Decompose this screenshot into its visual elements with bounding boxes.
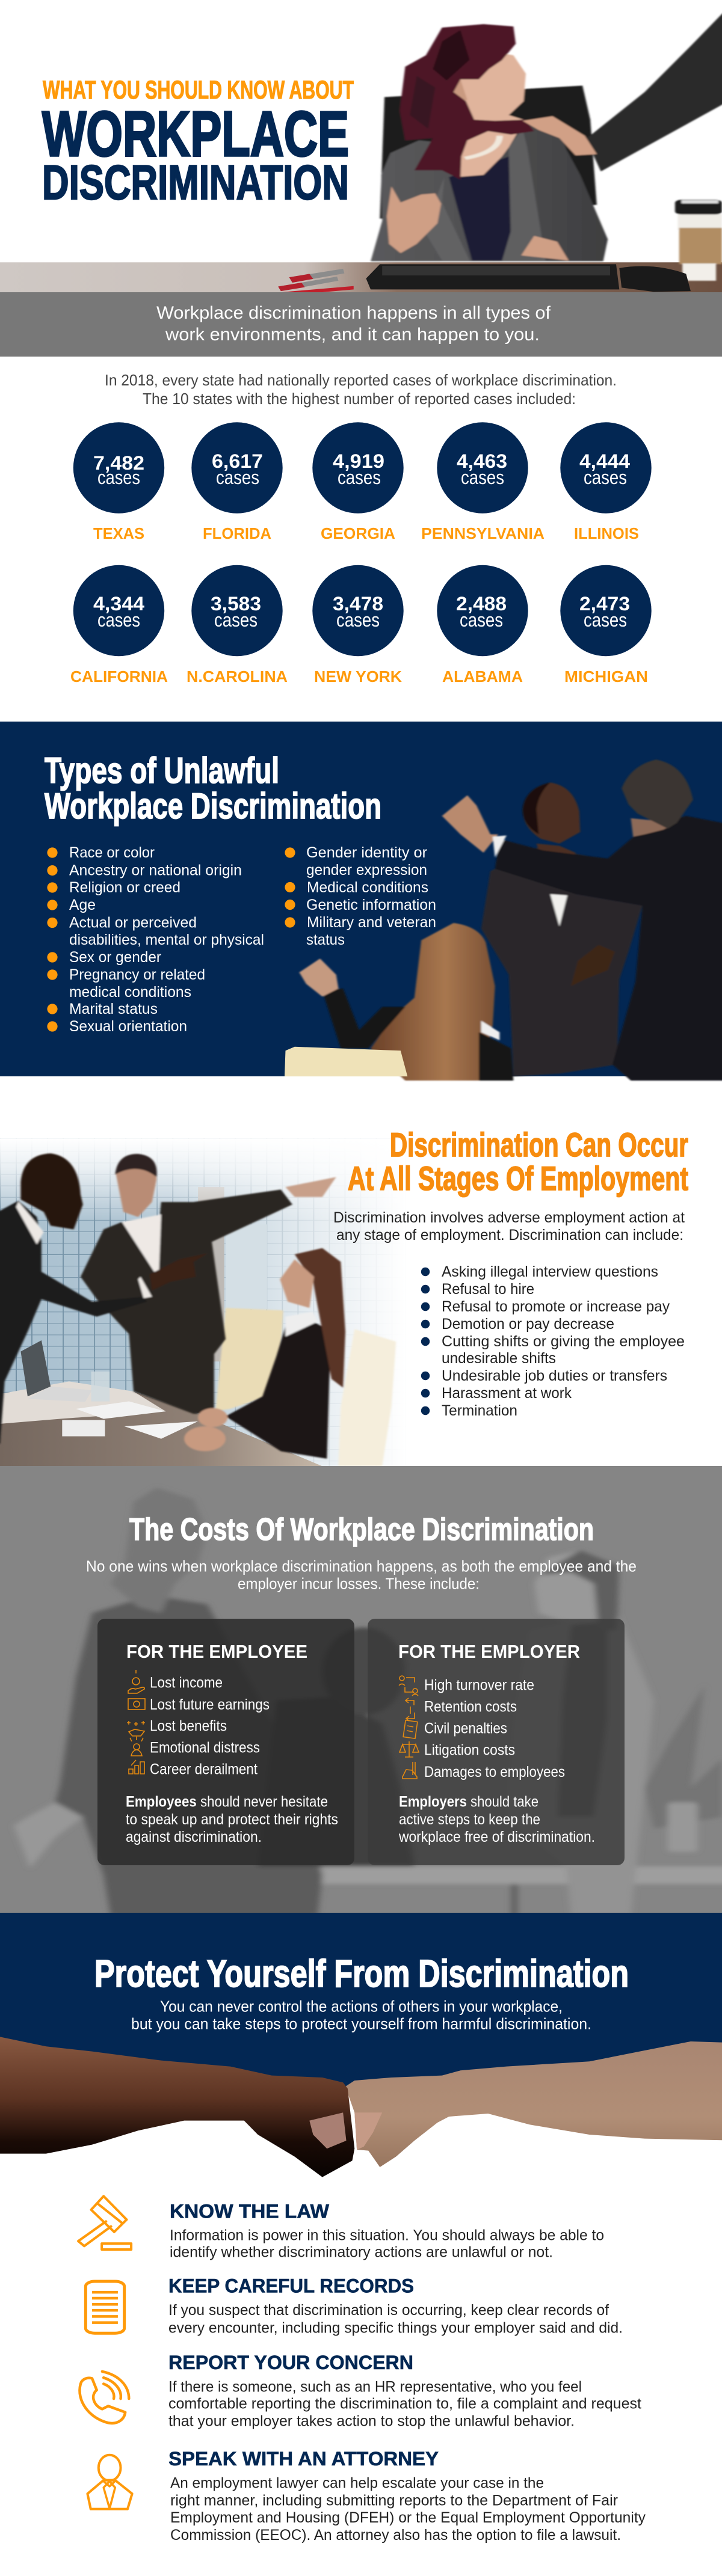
body text [168, 2379, 641, 2429]
list: adverse employment actions: Asking illegal interview questions [442, 1263, 658, 1280]
list: employer losses: Litigation costs [424, 1741, 515, 1758]
body text: If there is someone, such as an HR representative, who you feel [168, 2379, 582, 2396]
stat: Texas [73, 422, 164, 542]
stat: California [70, 565, 168, 685]
list: types column 1: Ancestry or national origin [69, 862, 242, 879]
list: types column 1: Religion or creed [69, 879, 180, 896]
stat: Pennsylvania: 4,463 [457, 450, 507, 472]
body text: that your employer takes action to stop the unlawful behavior. [168, 2412, 575, 2429]
list: adverse employment actions: Cutting shifts or giving the employee [442, 1333, 685, 1350]
hero title: WORKPLACE [42, 99, 349, 170]
stat: North Carolina: N.CAROLINA [187, 667, 288, 685]
text: costs introduction: employer incur losses. These include: [238, 1574, 480, 1592]
list: types column 2: status [306, 931, 345, 948]
list: employer losses: Damages to employees [424, 1764, 565, 1780]
text: employee advice [126, 1794, 338, 1845]
hero title: DISCRIMINATION [42, 156, 349, 210]
intro text: 2018 state statistics: The 10 states with the highest number of reported cases included: [143, 390, 576, 408]
body text: If you suspect that discrimination is occurring, keep clear records of [168, 2302, 609, 2319]
text: protect introduction: but you can take steps to protect yourself from harmful discrimination. [131, 2014, 591, 2032]
text: costs introduction [86, 1557, 637, 1592]
stat: Alabama: cases [460, 609, 503, 631]
heading: REPORT YOUR CONCERN [168, 2352, 413, 2373]
list: types column 1: disabilities, mental or physical [69, 931, 264, 948]
text: employer advice: workplace free of discrimination. [398, 1829, 595, 1845]
body text: comfortable reporting the discrimination to, file a complaint and request [168, 2396, 641, 2412]
stat: Michigan [560, 565, 652, 685]
stat: California: 4,344 [93, 593, 144, 615]
list: employee losses: Lost income [150, 1674, 223, 1691]
hero panel [0, 5, 722, 292]
text: employee advice: against discrimination. [126, 1829, 262, 1845]
stat: Illinois: cases [584, 467, 627, 488]
gray intro band [0, 292, 722, 357]
heading: types of unlawful workplace discrimination [45, 750, 381, 826]
stat: Alabama [437, 565, 528, 685]
list: employer losses: High turnover rate [424, 1676, 534, 1693]
text: stages introduction [333, 1209, 685, 1244]
list: types column 2: Medical conditions [307, 879, 428, 896]
text: costs introduction: No one wins when workplace discrimination happens, as both the employee and the [86, 1557, 637, 1575]
stat: Alabama: ALABAMA [442, 667, 523, 685]
card heading: employee: FOR THE EMPLOYEE [126, 1641, 307, 1662]
step: know the law [78, 2196, 604, 2261]
stat: Texas: 7,482 [93, 452, 144, 474]
card: for the employee [97, 1619, 354, 1865]
stat: Texas: cases [97, 467, 140, 488]
list: employee losses: Lost benefits [150, 1717, 227, 1734]
heading: KNOW THE LAW [170, 2201, 330, 2222]
heading: the costs of workplace discrimination: The Costs Of Workplace Discrimination [129, 1512, 594, 1547]
heading: SPEAK WITH AN ATTORNEY [168, 2448, 439, 2470]
text: employer advice: active steps to keep the [399, 1811, 540, 1828]
list: adverse employment actions [421, 1263, 685, 1419]
stat: North Carolina: 3,583 [211, 593, 261, 615]
list: types column 2: Military and veteran [307, 914, 436, 931]
photo: arguing coworkers [285, 759, 722, 1081]
stat: North Carolina [187, 565, 288, 685]
stat: New York: cases [336, 609, 380, 631]
text: stages introduction: any stage of employment. Discrimination can include: [336, 1227, 683, 1244]
stat: Michigan: cases [584, 609, 627, 631]
panel: protect yourself [0, 1913, 722, 2177]
stat: Michigan: 2,473 [579, 593, 630, 615]
body text: Information is power in this situation. You should always be able to [170, 2227, 604, 2244]
hero title [42, 99, 349, 210]
step: keep careful records [85, 2275, 623, 2337]
body text: every encounter, including specific things your employer said and did. [168, 2320, 623, 2337]
hero kicker: WHAT YOU SHOULD KNOW ABOUT [43, 76, 354, 105]
step: speak with an attorney [87, 2448, 646, 2544]
panel: stages of employment [0, 1126, 688, 1466]
stat: Georgia: cases [338, 467, 381, 488]
body text [170, 2475, 646, 2544]
list: adverse employment actions: Demotion or pay decrease [442, 1316, 614, 1332]
list: adverse employment actions: Undesirable job duties or transfers [442, 1367, 667, 1384]
panel: costs of workplace discrimination [0, 1466, 722, 1916]
stat: North Carolina: cases [214, 609, 258, 631]
photo: office argument in front of windows [0, 1138, 405, 1466]
gray intro band: Workplace discrimination happens in all types of [156, 303, 551, 323]
icons: employee losses [127, 1670, 145, 1774]
icon: phone [79, 2372, 129, 2423]
list: employee losses [150, 1674, 270, 1777]
card: for the employer [368, 1619, 625, 1865]
stat: Pennsylvania: cases [461, 467, 504, 488]
step: report your concern [79, 2352, 641, 2429]
heading: KEEP CAREFUL RECORDS [168, 2275, 414, 2297]
stat: Georgia: 4,919 [333, 450, 384, 472]
stat: Florida [191, 422, 283, 542]
stat: Georgia [312, 422, 404, 542]
text: employer advice [398, 1794, 595, 1845]
background photo: gray office scene [14, 1488, 722, 1916]
list: types column 1 [47, 844, 264, 1035]
gray intro band: work environments, and it can happen to you. [165, 325, 540, 345]
stat: New York: 3,478 [333, 593, 383, 615]
list: types column 1: Marital status [69, 1001, 158, 1017]
hero desk [0, 262, 722, 292]
stat: New York: NEW YORK [314, 667, 402, 685]
list: types column 1: Actual or perceived [69, 914, 197, 931]
list: types column 1: Pregnancy or related [69, 966, 205, 983]
hero photo: woman at desk with hand on her shoulder [278, 5, 722, 292]
text: stages introduction: Discrimination involves adverse employment action at [333, 1209, 685, 1226]
photo: two arms fist bump [0, 2034, 722, 2177]
body text: identify whether discriminatory actions are unlawful or not. [170, 2244, 553, 2261]
icon: attorney [87, 2455, 132, 2509]
panel: types of unlawful discrimination [0, 722, 722, 1081]
list: employee losses: Career derailment [150, 1761, 258, 1777]
intro text: 2018 state statistics: In 2018, every state had nationally reported cases of workplace discrimination. [105, 371, 617, 389]
list: employer losses: Retention costs [424, 1698, 517, 1715]
text: protect introduction: You can never control the actions of others in your workplace, [160, 1998, 563, 2016]
list: adverse employment actions: Refusal to promote or increase pay [442, 1298, 670, 1315]
stat: Pennsylvania [421, 422, 545, 542]
heading: types of unlawful workplace discrimination: Types of Unlawful [45, 750, 279, 791]
list: types column 2 [285, 844, 436, 948]
stat: New York [312, 565, 404, 685]
list: types column 1: medical conditions [69, 984, 191, 1001]
heading: types of unlawful workplace discrimination: Workplace Discrimination [45, 786, 381, 826]
body text: An employment lawyer can help escalate your case in the [170, 2475, 544, 2492]
list: adverse employment actions: Termination [442, 1402, 517, 1419]
list: types column 1: Sex or gender [69, 949, 161, 966]
body text: Employment and Housing (DFEH) or the Equal Employment Opportunity [170, 2509, 646, 2526]
icons: employer losses [399, 1676, 419, 1779]
stat: Florida: FLORIDA [203, 524, 271, 542]
text: employee advice: Employees should never hesitate [126, 1794, 328, 1811]
heading: discrimination can occur [348, 1126, 688, 1197]
list: employee losses: Lost future earnings [150, 1696, 270, 1713]
list: types column 2: gender expression [306, 862, 427, 879]
icon: document [85, 2281, 125, 2333]
list: types column 1: Sexual orientation [69, 1018, 187, 1035]
body text [170, 2227, 604, 2261]
list: employee losses: Emotional distress [150, 1739, 260, 1756]
state statistics grid [70, 422, 652, 685]
list: employer losses: Civil penalties [424, 1720, 507, 1737]
list: adverse employment actions: Refusal to hire [442, 1281, 534, 1298]
stat: Illinois [560, 422, 652, 542]
list: types column 2: Gender identity or [306, 844, 427, 861]
list: adverse employment actions: Harassment at work [442, 1385, 572, 1402]
body text: Commission (EEOC). An attorney also has the option to file a lawsuit. [170, 2527, 621, 2544]
stat: Texas: TEXAS [93, 524, 144, 542]
list: types column 2: Genetic information [306, 897, 436, 913]
stat: Florida: cases [216, 467, 259, 488]
stat: Pennsylvania: PENNSYLVANIA [421, 524, 545, 542]
stat: Florida: 6,617 [212, 450, 263, 472]
list: types column 1: Race or color [69, 844, 155, 861]
text: employee advice: to speak up and protect their rights [126, 1811, 338, 1828]
stat: Alabama: 2,488 [456, 593, 507, 615]
stat: Michigan: MICHIGAN [564, 667, 648, 685]
text: protect introduction [131, 1998, 591, 2032]
list: adverse employment actions: undesirable shifts [442, 1350, 556, 1367]
list: types column 1: Age [69, 897, 96, 913]
list: employer losses [424, 1676, 565, 1780]
stat: Illinois: 4,444 [579, 450, 630, 472]
body text [168, 2302, 623, 2337]
intro text: 2018 state statistics [105, 371, 617, 408]
body text: right manner, including submitting reports to the Department of Fair [170, 2492, 618, 2509]
stat: California: CALIFORNIA [70, 667, 168, 685]
stat: Illinois: ILLINOIS [574, 524, 639, 542]
icon: gavel [78, 2196, 131, 2249]
stat: California: cases [97, 609, 140, 631]
text: employer advice: Employers should take [399, 1794, 538, 1811]
stat: Georgia: GEORGIA [321, 524, 395, 542]
card heading: employer: FOR THE EMPLOYER [398, 1641, 580, 1662]
